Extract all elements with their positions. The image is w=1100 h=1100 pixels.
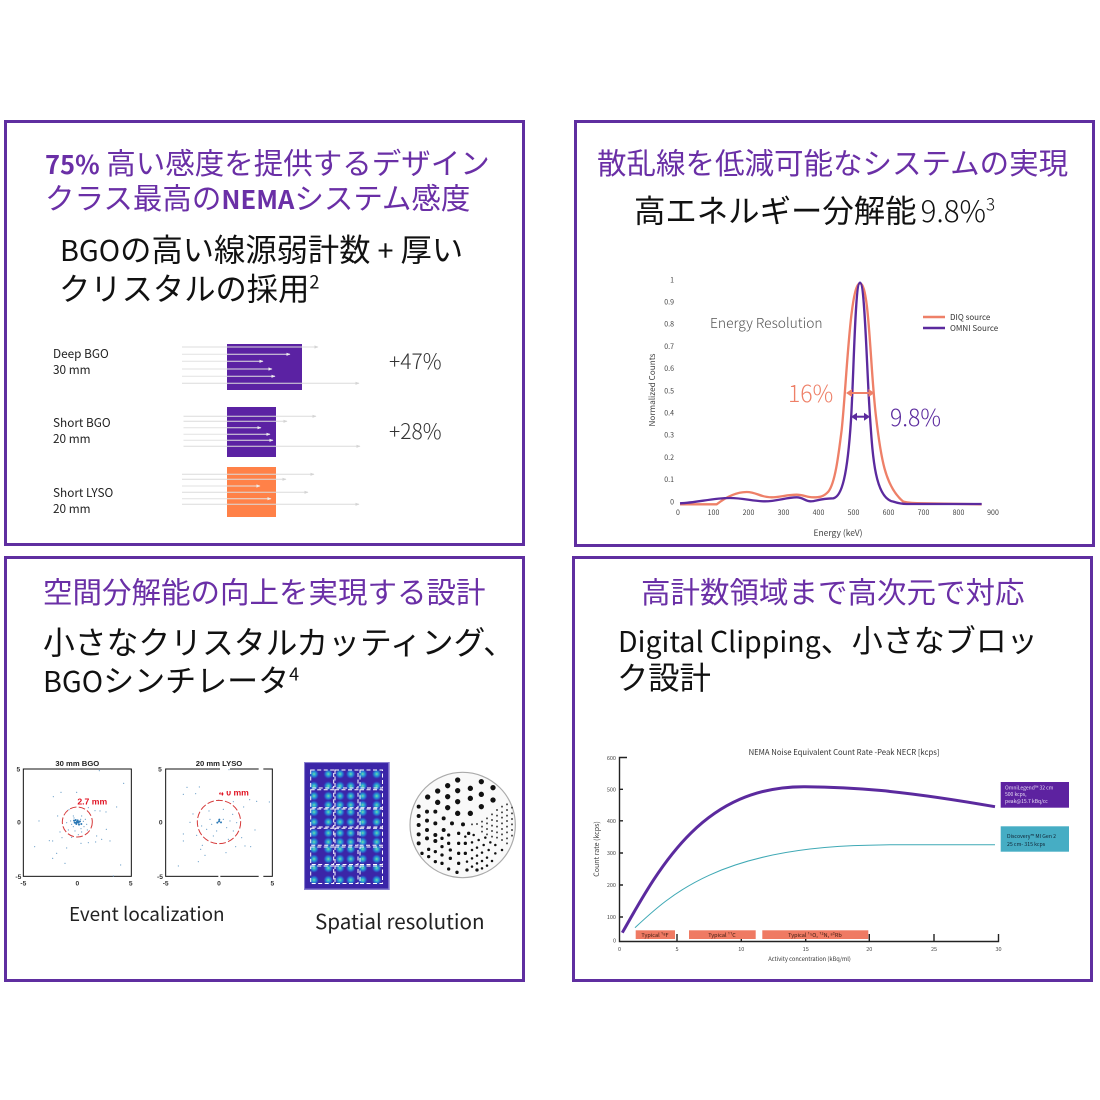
- x axis tick labels: 0: [676, 508, 680, 518]
- y tick labels: 200: [607, 881, 616, 889]
- text: BGO scintillator: BGOシンチレータ4: [43, 656, 299, 701]
- y axis tick labels: 1: [670, 276, 674, 286]
- chart title: Energy Resolution: [710, 312, 823, 332]
- panel: scatter reduction: [574, 120, 1095, 547]
- x tick labels: 5: [675, 945, 679, 953]
- plot: 20 mm LYSO: [157, 759, 274, 888]
- y tick labels: 300: [607, 849, 616, 857]
- legend: Discovery MI: Discovery™ MI Gen 2: [1007, 833, 1056, 840]
- plot: 30 mm BGO: 0: [75, 881, 79, 888]
- x tick labels: 15: [803, 945, 809, 953]
- value: 9.8%: 9.8%: [890, 399, 941, 433]
- legend: Omni Legend: OmniLegend™ 32 cm: [1005, 784, 1054, 792]
- x axis tick labels: 100: [708, 508, 719, 518]
- scatter plots: event localization: [15, 759, 274, 888]
- y tick labels: 600: [607, 754, 616, 762]
- y tick labels: 500: [607, 786, 616, 794]
- plot: 30 mm BGO: 5: [129, 881, 133, 888]
- caption: spatial resolution: Spatial resolution: [315, 905, 485, 935]
- heading: scatter: 散乱線を低減可能なシステムの実現: [597, 141, 1068, 183]
- heading: high count rate: 高計数領域まで高次元で対応: [641, 570, 1025, 612]
- plot: 30 mm BGO: -5: [15, 874, 22, 881]
- y axis tick labels: 0.6: [664, 364, 674, 374]
- plot: 20 mm LYSO: -5: [163, 881, 169, 888]
- legend: Omni Legend: peak@15.7 kBq/cc: [1005, 798, 1048, 805]
- y tick labels: 400: [607, 817, 616, 825]
- curve: Omni Legend: [622, 787, 995, 933]
- y axis tick labels: 0.5: [664, 386, 674, 396]
- y axis title: Count rate (kcps): [592, 821, 602, 877]
- plot: 30 mm BGO: -5: [20, 881, 27, 888]
- label: deep BGO: Deep BGO: [53, 345, 109, 362]
- label: short BGO: 20 mm: [53, 430, 91, 447]
- arrow: 16% width: [846, 389, 874, 397]
- y axis tick labels: 0.4: [664, 408, 674, 418]
- value: +28%: +28%: [389, 416, 442, 446]
- y axis tick labels: 0.8: [664, 320, 674, 330]
- text: block design: ク設計: [617, 654, 711, 699]
- chart: energy resolution: [646, 276, 999, 539]
- x tick labels: 20: [866, 945, 872, 953]
- arrow: 9.8% width: [851, 413, 870, 421]
- plot: 30 mm BGO: 5: [16, 766, 20, 773]
- plot: 20 mm LYSO: 5: [270, 881, 274, 888]
- curves: [680, 283, 982, 504]
- plot: 20 mm LYSO: 0: [159, 820, 163, 827]
- label: short LYSO: 20 mm: [53, 500, 91, 517]
- x tick labels: 25: [931, 945, 937, 953]
- x axis tick labels: 400: [813, 508, 824, 518]
- y axis tick labels: 0: [670, 498, 674, 508]
- crystal: short BGO: [227, 407, 276, 457]
- y axis tick labels: 0.2: [664, 453, 674, 463]
- crystal: short LYSO: [227, 467, 276, 517]
- plot: 30 mm BGO: 30 mm BGO: [55, 759, 99, 768]
- legend: [923, 312, 999, 334]
- y axis tick labels: [664, 276, 674, 508]
- label: deep BGO: 30 mm: [53, 361, 91, 378]
- y axis title: Normalized Counts: [646, 353, 658, 427]
- y axis tick labels: 0.3: [664, 430, 674, 440]
- x axis title: Energy (keV): [813, 527, 863, 539]
- x axis tick labels: 600: [883, 508, 894, 518]
- x tick labels: 0: [618, 945, 621, 953]
- label: short LYSO: [53, 484, 113, 517]
- x tick labels: 10: [738, 945, 744, 953]
- axes: [620, 758, 998, 942]
- legend: Discovery MI: 25 cm- 315 kcps: [1007, 841, 1046, 848]
- text: energy resolution: 高エネルギー分解能 9.8%3: [634, 187, 995, 232]
- heading: spatial resolution: 空間分解能の向上を実現する設計: [43, 570, 486, 612]
- x axis tick labels: 900: [987, 508, 999, 518]
- image: crystal flood map: [304, 762, 390, 890]
- y axis tick labels: 0.1: [664, 475, 674, 485]
- y axis tick labels: 0.7: [664, 342, 674, 352]
- x axis tick labels: 800: [953, 508, 964, 518]
- crystal: deep BGO: [227, 344, 302, 390]
- chart title: NEMA Noise Equivalent Count Rate -Peak NECR [kcps]: [749, 747, 939, 758]
- y tick labels: 0: [613, 936, 616, 944]
- value: 16%: 16%: [788, 375, 833, 409]
- legend: Discovery MI: [1001, 826, 1069, 852]
- label: short LYSO: Short LYSO: [53, 484, 113, 501]
- plot: 30 mm BGO: [15, 759, 133, 888]
- plot: 20 mm LYSO: 0: [217, 881, 221, 888]
- plot: 30 mm BGO: 0: [17, 820, 21, 827]
- value: +47%: +47%: [389, 346, 442, 376]
- panel: high count rate: [572, 556, 1093, 982]
- gamma rays: [182, 347, 360, 504]
- text: BGO stopping power: BGOの高い線源弱計数 + 厚い: [60, 226, 463, 271]
- isotope bars: Typical ¹¹C: [708, 931, 736, 939]
- label: deep BGO: [53, 345, 109, 378]
- x axis tick labels: 500: [848, 508, 859, 518]
- plot: 30 mm BGO: 2.7 mm: [77, 796, 107, 806]
- x axis tick labels: [676, 508, 999, 518]
- legend: Omni Legend: 500 kcps,: [1005, 791, 1027, 798]
- plot: 20 mm LYSO: -5: [157, 874, 163, 881]
- legend: Omni Legend: [1001, 782, 1069, 808]
- legend: OMNI Source: [950, 323, 999, 334]
- curve: OMNI source: [680, 283, 982, 504]
- curve: Discovery MI: [635, 845, 995, 928]
- plot: 20 mm LYSO: 4.0 mm: [219, 787, 249, 797]
- plot: 20 mm LYSO: 20 mm LYSO: [196, 759, 242, 768]
- heading: sensitivity: 75% 高い感度を提供するデザイン: [45, 141, 490, 183]
- heading: NEMA sensitivity: クラス最高のNEMAシステム感度: [45, 176, 470, 218]
- y tick labels: [607, 754, 616, 944]
- y axis tick labels: 0.9: [664, 298, 674, 308]
- label: short BGO: [53, 414, 111, 447]
- x axis tick labels: 700: [918, 508, 929, 518]
- caption: event localization: Event localization: [69, 900, 225, 927]
- panel: system sensitivity: [4, 120, 525, 546]
- x axis tick labels: 200: [743, 508, 754, 518]
- image: hot rod phantom: [409, 772, 516, 878]
- legend: DIQ source: [950, 312, 991, 323]
- x axis tick labels: 300: [778, 508, 789, 518]
- x axis title: Activity concentration (kBq/ml): [768, 954, 851, 963]
- text: small crystal cutting: 小さなクリスタルカッティング、: [43, 618, 515, 664]
- isotope bars: Typical ¹⁵O, ¹³N, ⁸²Rb: [788, 931, 842, 939]
- chart: NECR: [592, 747, 1069, 963]
- label: short BGO: Short BGO: [53, 414, 111, 431]
- y tick labels: 100: [607, 913, 616, 921]
- plot: 20 mm LYSO: 5: [158, 766, 162, 773]
- text: digital clipping: Digital Clipping、小さなブロッ: [618, 616, 1038, 661]
- isotope bars: [636, 930, 868, 939]
- diagram: crystals with gamma rays: [182, 344, 360, 517]
- x tick labels: 30: [995, 945, 1002, 953]
- text: thick crystal: クリスタルの採用2: [59, 265, 319, 310]
- isotope bars: Typical ¹⁸F: [641, 931, 669, 939]
- curve: DIQ source: [680, 283, 982, 504]
- x tick labels: [618, 945, 1002, 953]
- panel: spatial resolution: [4, 556, 525, 982]
